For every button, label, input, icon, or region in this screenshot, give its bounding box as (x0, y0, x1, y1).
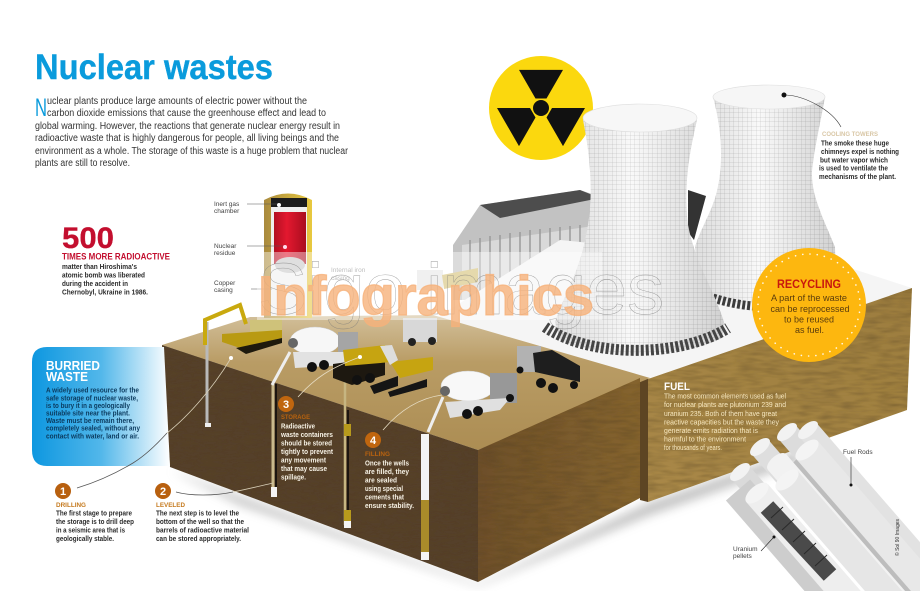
fuel rod labels: © Sol 90 Images (894, 518, 901, 556)
panel: burried waste: is to bury it in a geologically (46, 403, 130, 410)
intro paragraph: uclear plants produce large amounts of electric power without the (47, 96, 307, 107)
callout: cooling towers: but water vapor which (820, 158, 888, 164)
stat: 500 times more radioactive: during the accident in (62, 281, 128, 288)
intro paragraph: radioactive waste that is highly dangerous for people, all living beings and the (35, 133, 339, 144)
fuel rod labels (733, 449, 901, 560)
step 1: drilling: geologically stable. (56, 536, 114, 543)
step 4: filling: are sealed (365, 478, 397, 484)
canister labels: Internal iron (331, 267, 366, 274)
leader lines (77, 355, 442, 495)
fuel text block: generate emits radiation that is (664, 428, 758, 435)
step 4: filling: cements that (365, 494, 405, 502)
step 1: drilling: the storage is to drill deep (56, 519, 134, 526)
callout: cooling towers: The smoke these huge (821, 140, 889, 148)
fuel rod labels: pellets (733, 553, 753, 560)
panel: burried waste: Waste must be remain there, (46, 418, 134, 425)
icon: radiation symbol (489, 56, 593, 160)
callout: recycling (752, 248, 866, 362)
fuel text block (664, 381, 786, 452)
step 1: drilling (55, 483, 134, 543)
watermark: Sigo images (258, 250, 664, 330)
fuel text block: reactive capacities but the waste they (664, 420, 779, 426)
vehicle: cement mixer 2 (428, 371, 517, 432)
step 2: leveled: bottom of the well so that the (156, 519, 244, 526)
intro paragraph: environment as a whole. The storage of this waste is a huge problem that nuclear (35, 146, 349, 157)
watermark: Infographics (258, 264, 594, 327)
step 1: drilling: in a seismic area that is (56, 528, 125, 534)
ground shadow (170, 450, 800, 586)
panel: burried waste: A widely used resource for the (46, 388, 139, 394)
callout: recycling: RECYCLING (777, 277, 841, 291)
intro paragraph: carbon dioxide emissions that cause the greenhouse effect and lead to (47, 108, 326, 119)
panel: burried waste: BURRIED (46, 358, 100, 373)
fuel text block: for nuclear plants are plutonium 239 and (664, 402, 786, 409)
panel: burried waste: contact with water, land or air. (46, 434, 139, 440)
canister labels: Nuclear (214, 243, 237, 250)
vehicle: black dump truck (516, 346, 580, 393)
callout: cooling towers: chimneys expel is nothing (821, 149, 899, 156)
vehicle: cement mixer 1 (272, 327, 358, 385)
step 3: storage: tightly to prevent (281, 449, 334, 456)
canister labels: residue (214, 250, 236, 257)
wells (205, 322, 429, 560)
step 3: storage: 3 (283, 399, 289, 411)
vehicle: white truck (403, 268, 478, 346)
fuel rod labels: Uranium (733, 546, 758, 553)
canister labels: casing (214, 287, 233, 294)
panel: burried waste (32, 347, 170, 466)
step 4: filling: ensure stability. (365, 503, 414, 510)
step 1: drilling: The first stage to prepare (56, 510, 132, 518)
step 3: storage (278, 396, 334, 482)
callout: cooling towers (782, 92, 899, 181)
stat: 500 times more radioactive: atomic bomb was liberated (62, 272, 145, 280)
canister labels: Inert gas (214, 201, 240, 208)
canister labels: Copper (214, 280, 236, 287)
callout: recycling: A part of the waste (771, 293, 847, 304)
step 3: storage: should be stored (281, 440, 332, 448)
fuel rods illustration (726, 418, 920, 591)
step 1: drilling: 1 (60, 486, 66, 498)
white concrete slab (433, 240, 912, 378)
vehicle: dump truck and excavator (333, 345, 433, 397)
step 3: storage: STORAGE (281, 414, 310, 421)
callout: cooling towers: COOLING TOWERS (822, 132, 878, 138)
panel: burried waste: suitable site near the plant. (46, 410, 130, 418)
step 4: filling: FILLING (365, 451, 390, 458)
callout: recycling: can be reprocessed (770, 304, 850, 315)
step 4: filling (365, 432, 414, 510)
step 3: storage: any movement (281, 458, 327, 464)
fuel rod labels: Fuel Rods (843, 449, 873, 456)
step 3: storage: Radioactive (281, 424, 315, 430)
step 4: filling: 4 (370, 435, 377, 447)
canister labels (214, 201, 366, 294)
step 2: leveled: The next step is to level the (156, 510, 239, 518)
intro paragraph: N (35, 94, 47, 122)
canister labels: chamber (214, 208, 240, 215)
title: Nuclear wastes (35, 48, 273, 87)
callout: recycling: as fuel. (795, 325, 824, 336)
fuel text block: for thousands of years. (664, 445, 722, 452)
panel: burried waste: WASTE (46, 369, 88, 384)
step 4: filling: Once the wells (365, 460, 409, 468)
fuel text block: FUEL (664, 381, 690, 393)
cooling tower: rear (695, 85, 836, 306)
step 4: filling: are filled, they (365, 469, 409, 476)
intro paragraph (35, 94, 349, 169)
cooling tower: front (545, 104, 728, 353)
stat: 500 times more radioactive: TIMES MORE RADIOACTIVE (62, 252, 170, 262)
fuel text block: The most common elements used as fuel (664, 394, 786, 400)
step 3: storage: waste containers (280, 432, 333, 439)
stat: 500 times more radioactive: matter than Hiroshima's (62, 264, 137, 271)
stat: 500 times more radioactive: Chernobyl, Ukraine in 1986. (62, 290, 148, 296)
step 2: leveled: barrels of radioactive material (156, 528, 249, 534)
building behind towers (453, 190, 706, 300)
step 1: drilling: DRILLING (56, 502, 86, 509)
vehicle: crane (205, 305, 282, 354)
intro paragraph: global warming. However, the reactions that generate nuclear energy result in (35, 121, 340, 132)
step 2: leveled: can be stored appropriately. (156, 536, 241, 543)
callout: recycling: to be reused (784, 314, 834, 326)
step 3: storage: spillage. (281, 474, 306, 482)
step 4: filling: using special (365, 486, 403, 493)
canister cross-section (264, 194, 312, 318)
canister labels: casing (331, 275, 350, 282)
panel: burried waste: completely sealed, without any (46, 426, 140, 432)
callout: cooling towers: mechanisms of the plant. (819, 174, 896, 181)
step 3: storage: that may cause (281, 466, 327, 473)
panel: burried waste: safe storage of nuclear waste, (46, 396, 138, 402)
fuel text block: uranium 235. Both of them have great (664, 411, 777, 418)
stat: 500 times more radioactive: 500 (62, 222, 114, 255)
intro paragraph: plants are still to resolve. (35, 158, 130, 169)
step 2: leveled (155, 483, 249, 543)
block: fuel ground (640, 288, 912, 502)
block: burial ground (162, 315, 650, 582)
stat: 500 times more radioactive (62, 222, 170, 296)
step 2: leveled: 2 (160, 486, 166, 498)
callout: cooling towers: is used to ventilate the (819, 166, 888, 172)
fuel text block: harmful to the environment (664, 436, 746, 444)
step 2: leveled: LEVELED (156, 502, 185, 509)
